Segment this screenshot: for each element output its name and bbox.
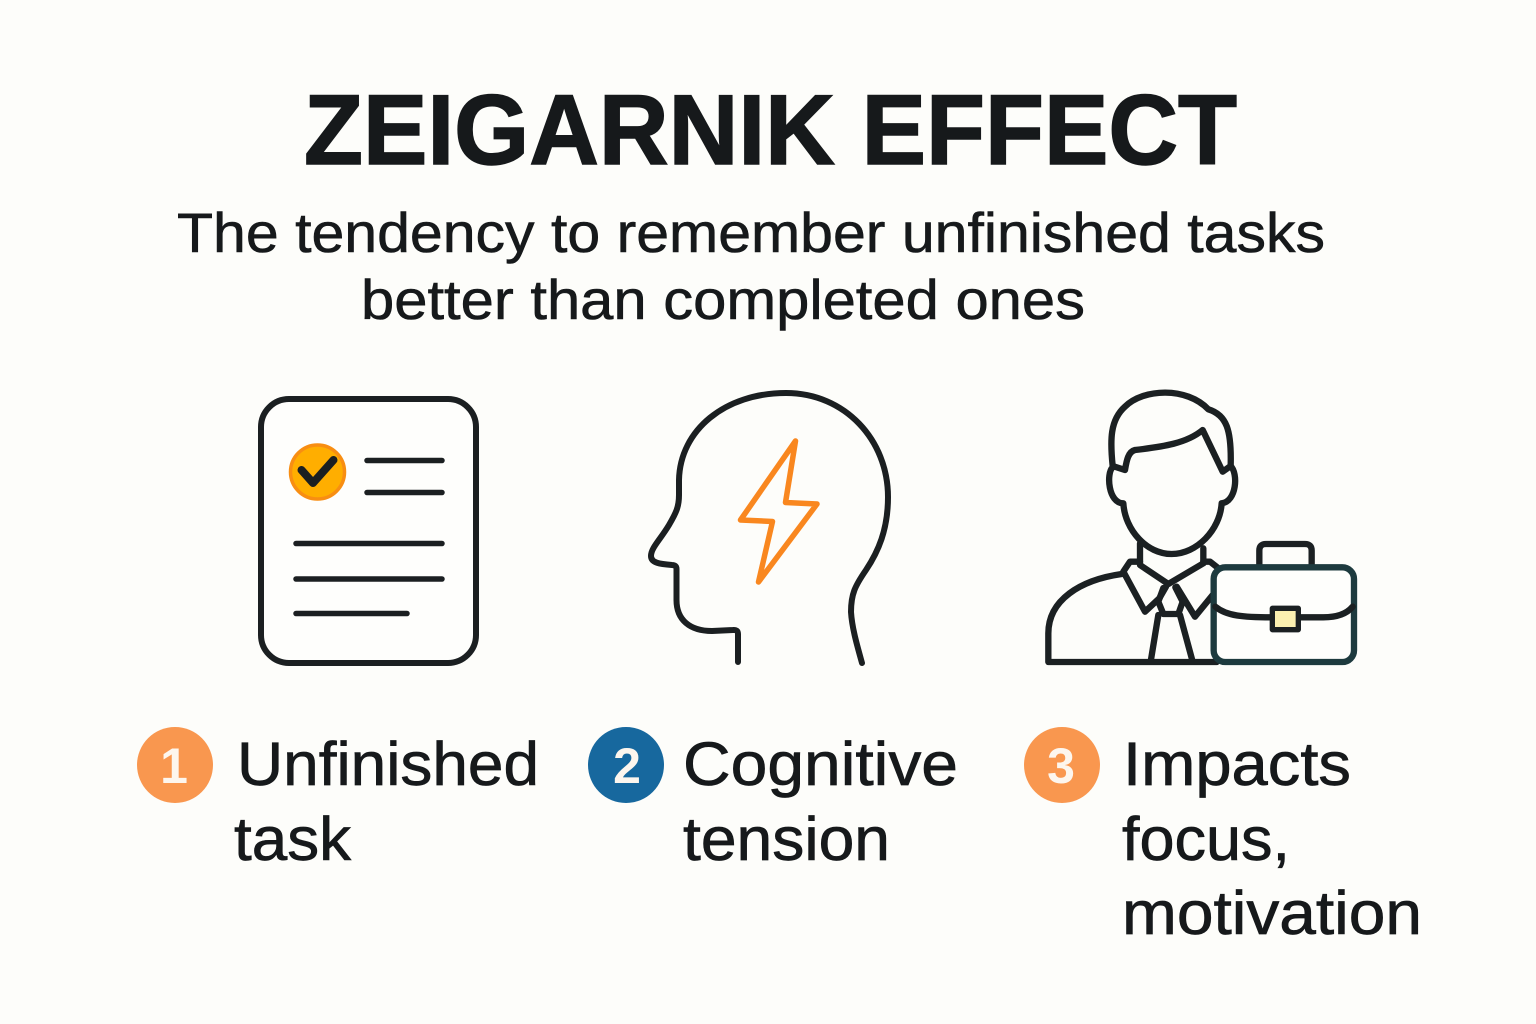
icon: check badge (290, 445, 344, 499)
label 3: motivation (1122, 879, 1422, 947)
badge 2: 2 (613, 738, 641, 794)
badge 3: 3 (1047, 738, 1075, 794)
subtitle (177, 201, 1325, 331)
subtitle: The tendency to remember unfinished tasks (177, 201, 1325, 264)
title: ZEIGARNIK EFFECT (304, 74, 1237, 185)
step 3: impacts focus, motivation (1024, 727, 1422, 947)
badge 2 (588, 727, 664, 803)
icon: head with lightning bolt (651, 393, 888, 663)
label 2 (683, 730, 958, 873)
icon: checklist document (261, 399, 476, 663)
lightning bolt (740, 441, 817, 582)
badge 3 (1024, 727, 1100, 803)
icon: businessperson with briefcase (1048, 393, 1354, 662)
person (1048, 393, 1235, 662)
label 2: Cognitive (683, 730, 958, 798)
label 1: task (234, 805, 352, 873)
badge 1: 1 (160, 738, 188, 794)
briefcase (1214, 544, 1354, 662)
label 3: focus, (1122, 805, 1290, 873)
clasp (1272, 608, 1298, 630)
label 1: Unfinished (237, 730, 539, 798)
label 3: Impacts (1123, 730, 1351, 798)
step 2: cognitive tension (588, 727, 958, 873)
subtitle: better than completed ones (361, 268, 1085, 331)
checklist lines (296, 460, 442, 614)
step 1: unfinished task (137, 727, 539, 873)
badge 1 (137, 727, 213, 803)
label 3 (1122, 730, 1422, 947)
label 2: tension (683, 805, 890, 873)
head outline (651, 393, 888, 663)
label 1 (234, 730, 539, 873)
